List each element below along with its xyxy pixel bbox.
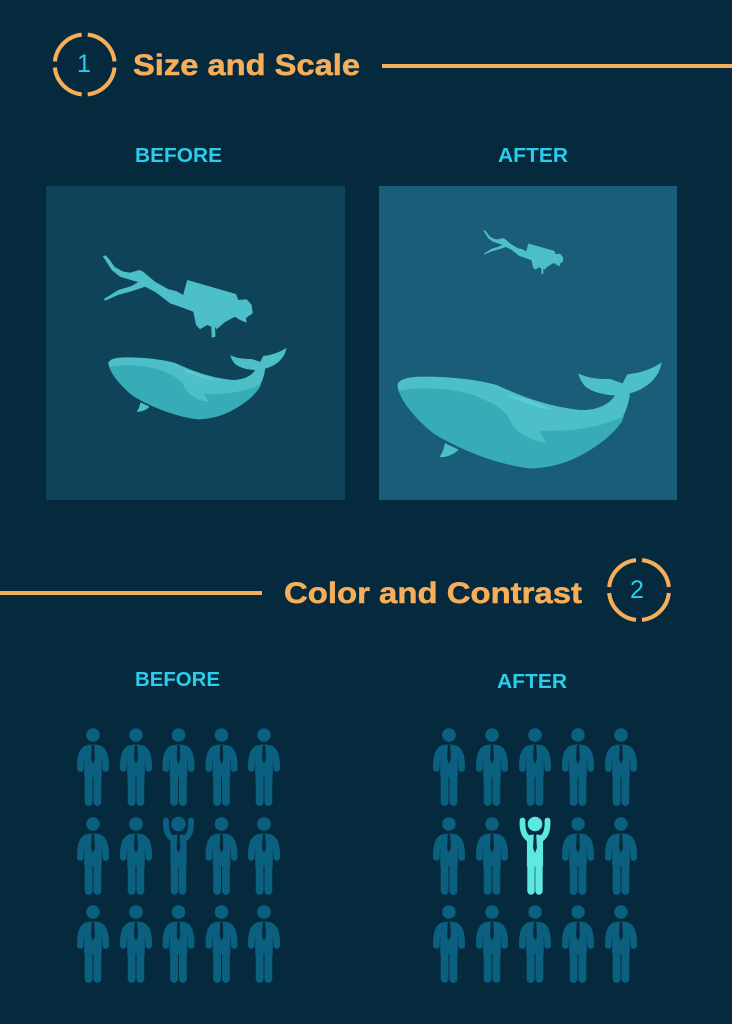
icon: diver after — [483, 230, 563, 274]
ring badge 1: 1 — [77, 50, 91, 78]
icon: diver before — [103, 256, 253, 338]
icon: whale after — [397, 362, 662, 468]
ring badge 2 — [609, 560, 669, 620]
ring badge 2: 2 — [630, 576, 644, 604]
label: after 2: AFTER — [497, 671, 568, 693]
panel: after scale — [379, 186, 677, 500]
heading rule — [382, 64, 732, 68]
ring badge 1 — [55, 35, 115, 94]
heading: Color and Contrast: Color and Contrast — [284, 577, 582, 610]
label: after 1: AFTER — [498, 145, 569, 167]
people grid: after — [434, 728, 636, 979]
panel: before scale — [46, 186, 345, 500]
section 2 header — [0, 560, 669, 620]
icon: whale before — [108, 348, 287, 419]
heading rule — [0, 591, 262, 595]
people grid: before — [78, 728, 278, 979]
label: before 2: BEFORE — [135, 669, 220, 691]
heading: Size and Scale: Size and Scale — [133, 49, 360, 82]
section 1 header — [55, 35, 732, 94]
label: before 1: BEFORE — [135, 145, 222, 167]
